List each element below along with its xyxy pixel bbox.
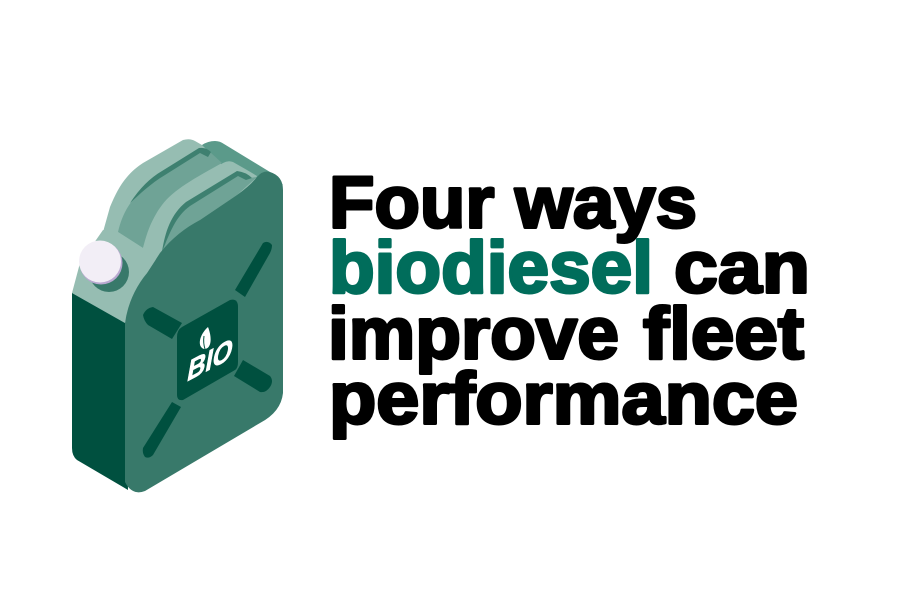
- title line 1: Four ways: [329, 162, 697, 244]
- title line 3: fleet: fleet: [643, 294, 804, 374]
- can front handle band: [143, 161, 257, 262]
- can shoulder: [72, 230, 160, 323]
- stamp: upper right: [235, 242, 272, 297]
- title line 4: performance: [329, 358, 798, 440]
- title: [328, 162, 810, 440]
- can rear body: [170, 141, 283, 240]
- cap neck: [89, 252, 129, 292]
- icon: biodiesel jerry can: [72, 139, 283, 492]
- can rear handle gap: [130, 148, 211, 203]
- center label plate: [177, 300, 238, 400]
- stamp: lower right: [234, 360, 272, 392]
- stamp: upper left: [143, 307, 182, 339]
- can front face: [125, 172, 283, 492]
- stamp: lower left: [143, 402, 181, 458]
- title line 2: highlighted word: biodiesel: [329, 228, 653, 308]
- can recessed stamps: [143, 242, 272, 458]
- can front handle opening: [162, 172, 257, 252]
- leaf icon: [200, 327, 211, 349]
- BIO label: BIO: [185, 331, 236, 389]
- title line 2: can: can: [674, 228, 810, 308]
- cap: [79, 240, 121, 282]
- can left side: [72, 293, 128, 490]
- title line 3: improve: improve: [328, 294, 619, 374]
- can rear handle opening: [118, 150, 222, 248]
- cap shadow rim: [80, 242, 122, 284]
- can front handle gap: [162, 171, 252, 252]
- can rear handle band: [103, 139, 222, 270]
